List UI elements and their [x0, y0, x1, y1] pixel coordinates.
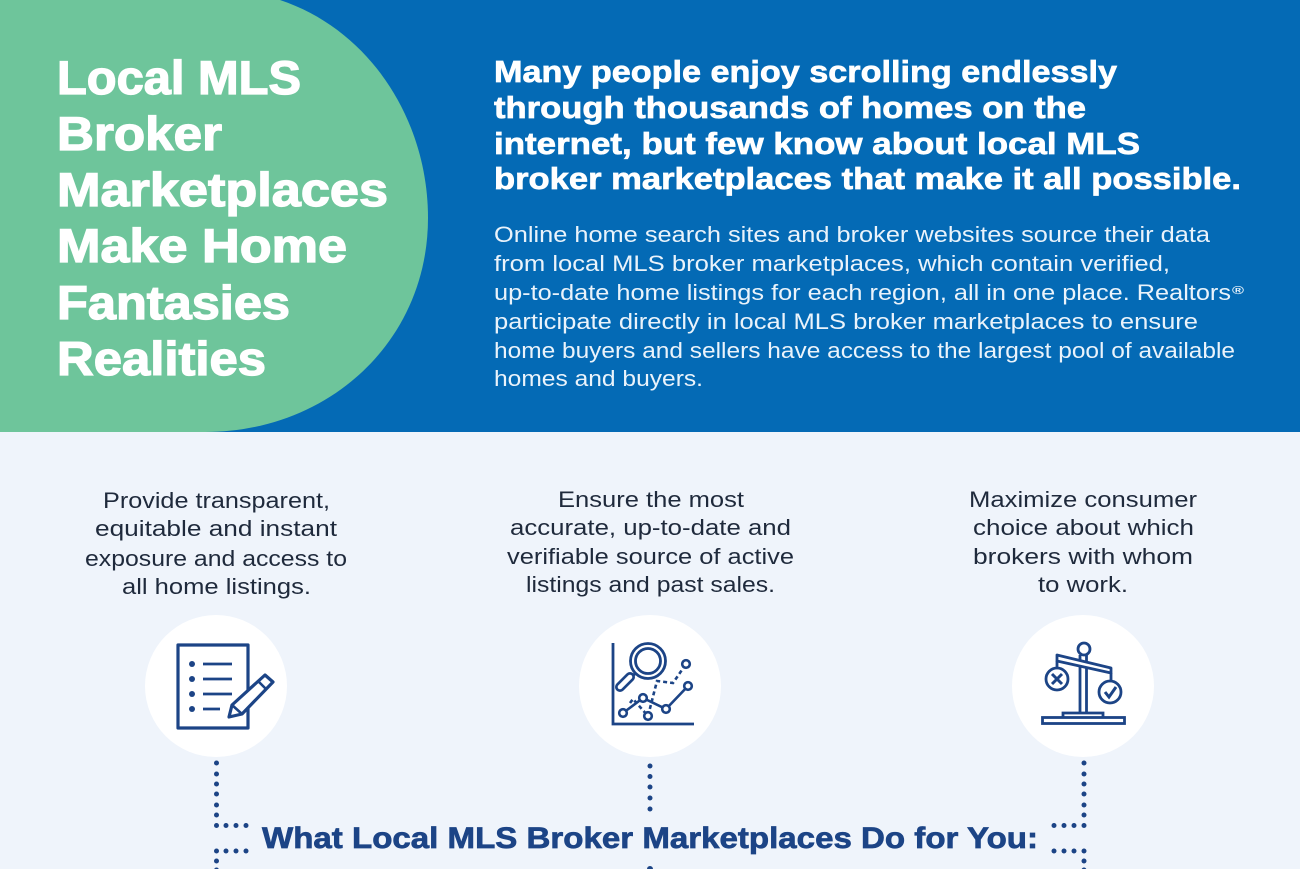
- text block: benefit three: brokers with whom: [973, 544, 1193, 569]
- intro heading: [494, 54, 1241, 196]
- text block: benefit two: listings and past sales.: [526, 572, 775, 597]
- intro heading: Many people enjoy scrolling endlessly: [494, 54, 1118, 89]
- intro heading: broker marketplaces that make it all possible.: [494, 161, 1241, 196]
- text block: benefit two: [507, 487, 794, 597]
- intro heading: internet, but few know about local MLS: [494, 126, 1140, 161]
- connector: centre dotted line: [647, 764, 653, 869]
- title: Broker: [57, 107, 222, 160]
- text block: benefit two: accurate, up-to-date and: [510, 515, 791, 540]
- intro body text: [494, 222, 1244, 391]
- panel: green title shape: [0, 0, 428, 432]
- text block: benefit one: all home listings.: [122, 574, 311, 599]
- connector: right dotted line: [1052, 760, 1086, 869]
- title: Make Home: [57, 219, 347, 272]
- text block: benefit three: to work.: [1038, 572, 1128, 597]
- intro body text: participate directly in local MLS broker marketplaces to ensure: [494, 309, 1198, 334]
- connector: left dotted line: [214, 760, 248, 869]
- text block: benefit one: Provide transparent,: [103, 488, 330, 513]
- intro body text: from local MLS broker marketplaces, which contain verified,: [494, 251, 1170, 276]
- title: Realities: [57, 332, 266, 385]
- text block: benefit two: Ensure the most: [558, 487, 744, 512]
- intro body text: ®: [1232, 285, 1244, 297]
- title: Marketplaces: [57, 163, 388, 216]
- title: Fantasies: [57, 276, 290, 329]
- text block: benefit one: equitable and instant: [95, 516, 337, 541]
- text block: benefit one: [85, 488, 347, 599]
- intro body text: up-to-date home listings for each region, all in one place. Realtors: [494, 280, 1231, 305]
- intro body text: home buyers and sellers have access to the largest pool of available: [494, 338, 1235, 363]
- text block: benefit one: exposure and access to: [85, 546, 347, 571]
- text block: benefit three: [969, 487, 1197, 597]
- section heading: What Local MLS Broker Marketplaces Do for You:: [262, 822, 1038, 855]
- title: [57, 51, 388, 385]
- text block: benefit two: verifiable source of active: [507, 544, 794, 569]
- title: Local MLS: [57, 51, 301, 104]
- intro heading: through thousands of homes on the: [494, 90, 1086, 125]
- text block: benefit three: Maximize consumer: [969, 487, 1197, 512]
- text block: benefit three: choice about which: [973, 515, 1194, 540]
- panel: blue header band: [0, 0, 1300, 432]
- intro body text: homes and buyers.: [494, 366, 703, 391]
- intro body text: Online home search sites and broker websites source their data: [494, 222, 1211, 247]
- icon: checklist and pencil: [145, 615, 287, 757]
- icon: balance scale: [1012, 615, 1154, 757]
- icon: magnifier over line chart: [579, 615, 721, 757]
